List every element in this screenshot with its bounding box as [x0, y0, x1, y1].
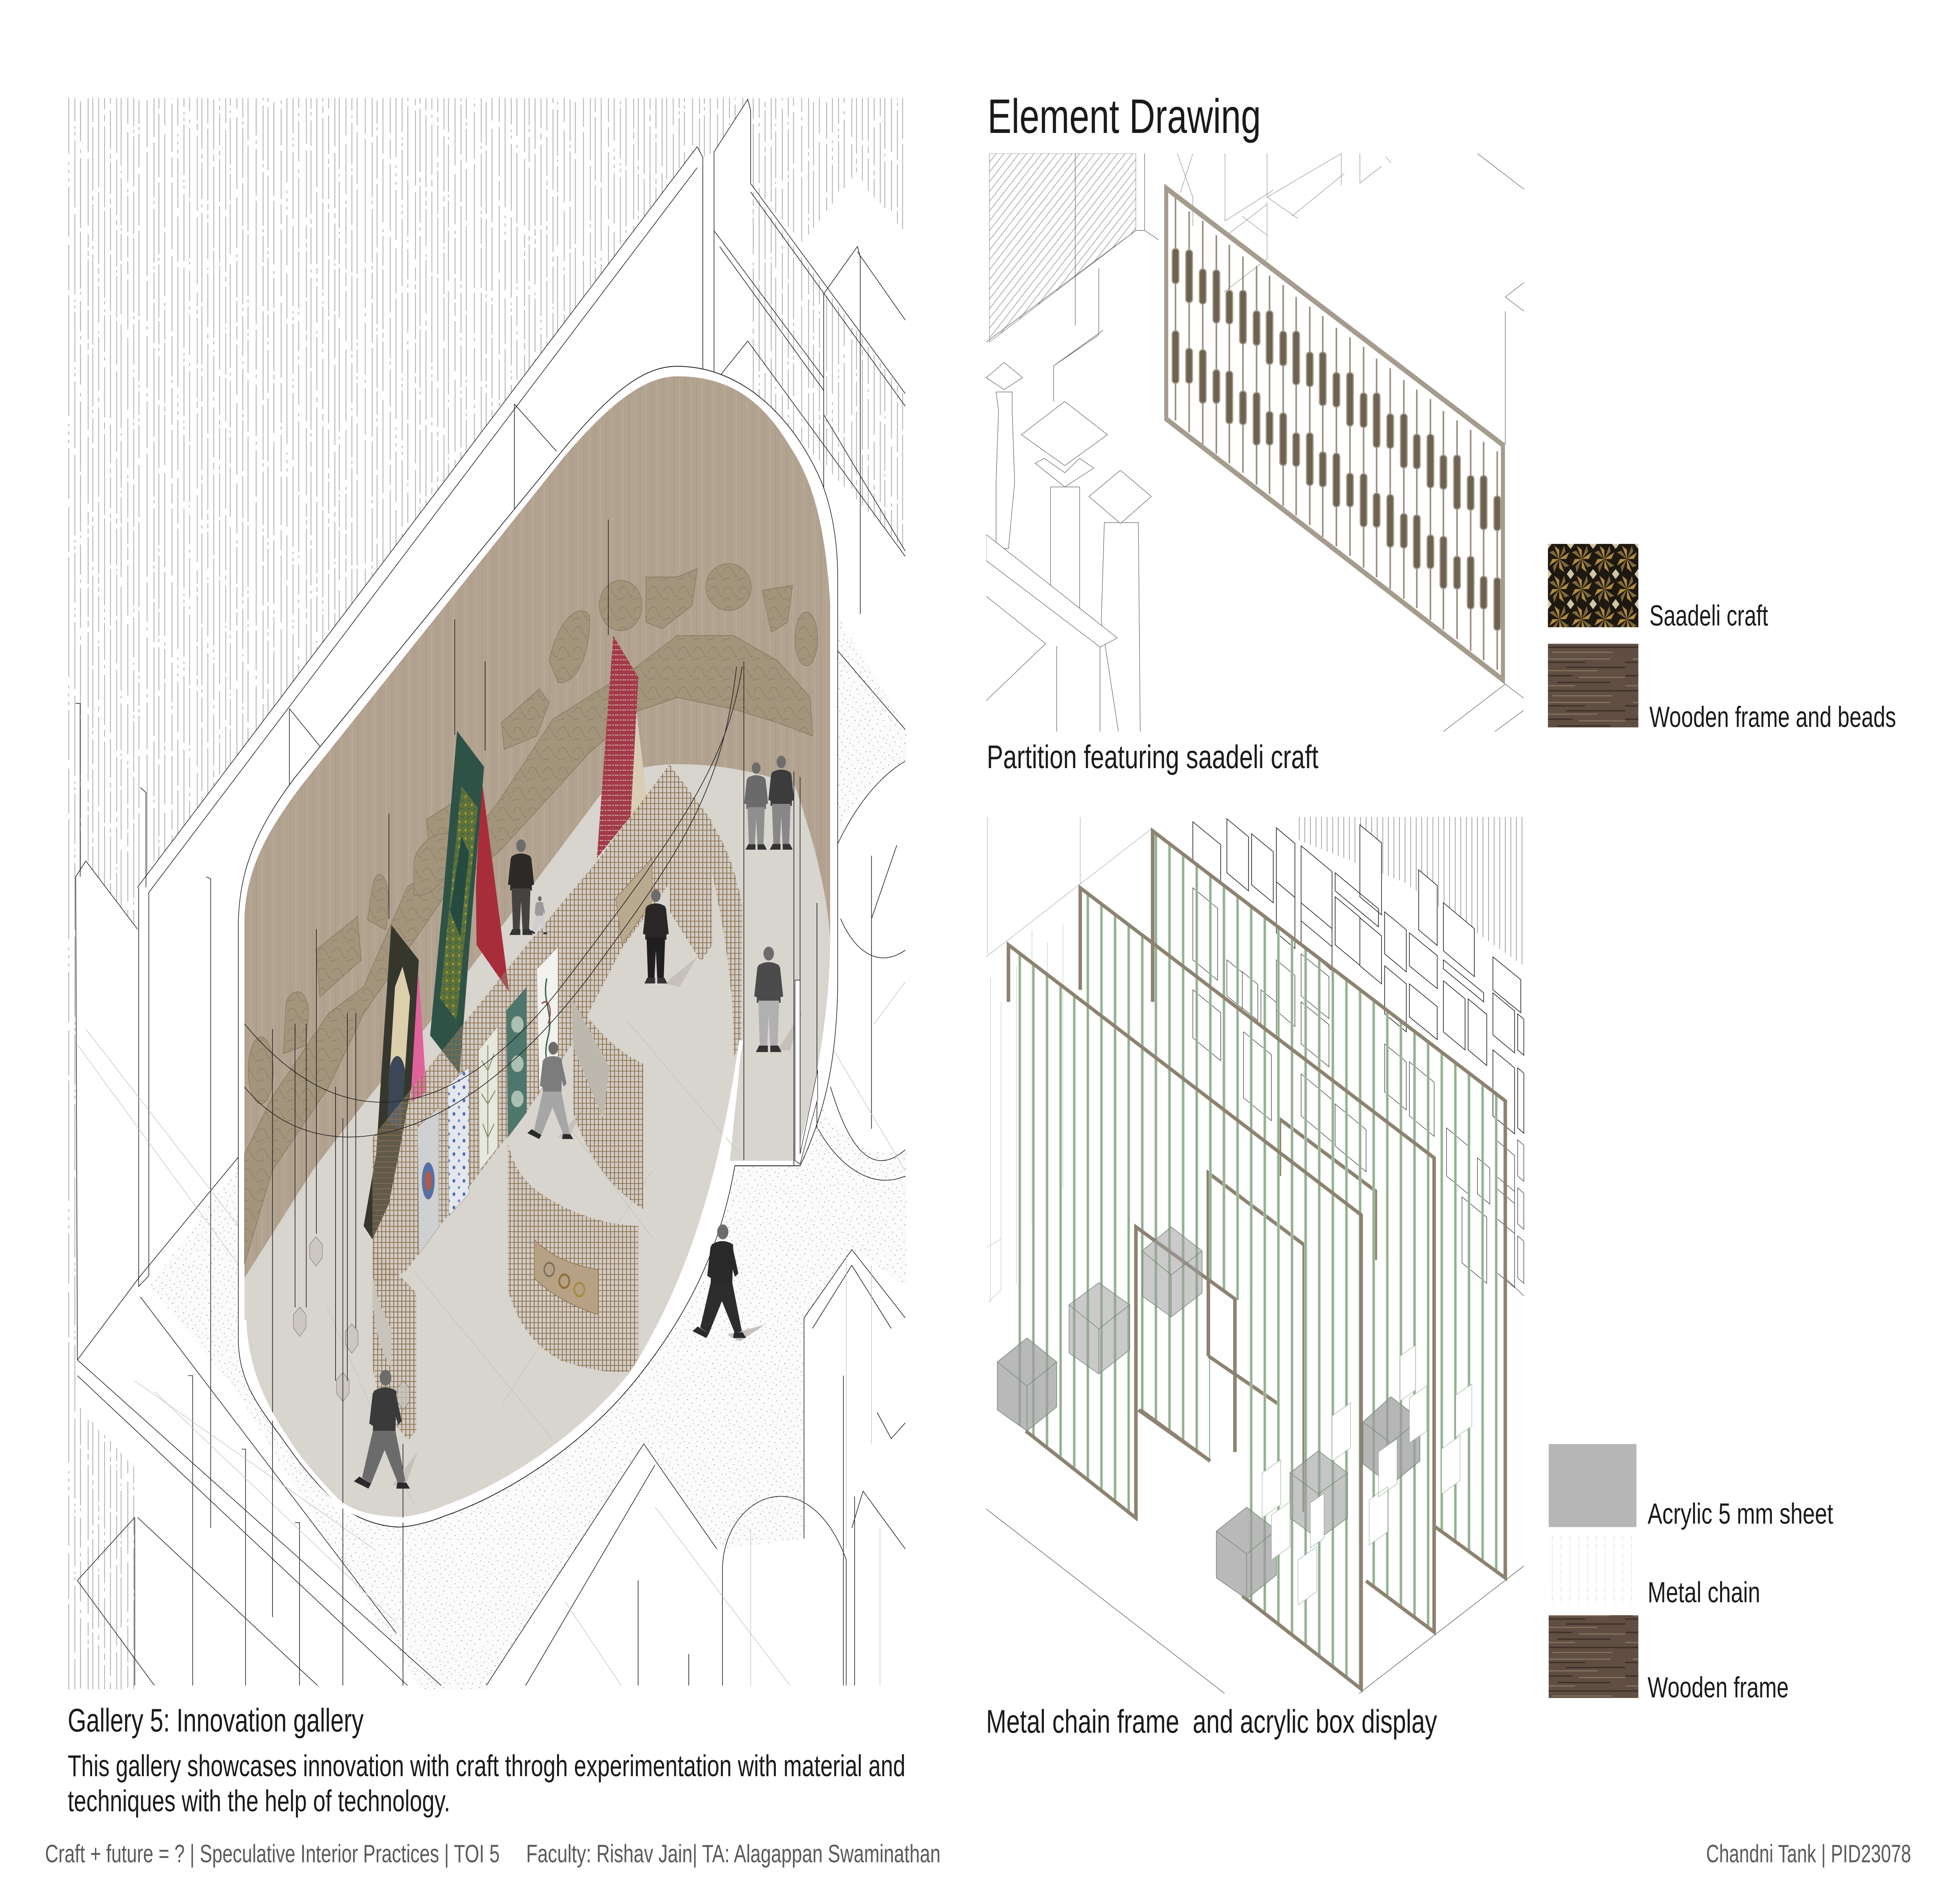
- box 2: [1069, 1283, 1130, 1374]
- carved frieze lower band: [245, 636, 813, 1265]
- footer: author: Chandni Tank | PID23078: [1706, 1840, 1911, 1868]
- swatch: wooden frame: [1549, 1615, 1638, 1698]
- hanging textile: peacock: [364, 925, 426, 1239]
- spine display case: [616, 858, 652, 945]
- lattice screen: jewellery display: [508, 1142, 638, 1372]
- white wall returns: [795, 980, 818, 1164]
- box 4: [1216, 1507, 1276, 1599]
- partition frame: [1166, 188, 1503, 680]
- background: dashed vertical hatching: [69, 5, 936, 1693]
- hanging textile: green carpet: [430, 731, 484, 1074]
- person: man in front walking: [354, 1370, 410, 1488]
- text: gallery description: [68, 1750, 906, 1818]
- floor joints and shadows: [326, 957, 802, 1505]
- footer: course line: Craft + future = ? | Speculative Interior Practices | TOI 5: [45, 1840, 500, 1868]
- panel: teal roundels: [506, 987, 527, 1137]
- heading: element drawing: Element Drawing: [987, 89, 1261, 144]
- panel: blue medallion: [417, 1107, 439, 1254]
- context: panelled wall and lines: [986, 817, 1524, 1694]
- box 3: [1142, 1227, 1202, 1317]
- speckled terrazzo ground: [149, 602, 907, 1689]
- person: man on right: [754, 947, 783, 1052]
- person: man looking at display: [643, 890, 669, 983]
- white display cards: [1262, 1345, 1472, 1605]
- text: gallery description: techniques with the help of technology.: [68, 1785, 450, 1818]
- bottom right white buildings: [737, 1249, 907, 1689]
- person: man with child: [508, 839, 548, 935]
- swatch: wooden frame and beads: [1548, 644, 1638, 727]
- frame 1: front: [1009, 945, 1361, 1689]
- panel: gallery axonometric drawing: [69, 5, 936, 1693]
- swatch: metal chain: [1552, 1535, 1632, 1604]
- label: acrylic: Acrylic 5 mm sheet: [1648, 1497, 1833, 1530]
- architectural line work: [76, 100, 905, 1686]
- heading: gallery title: Gallery 5: Innovation gallery: [68, 1702, 364, 1739]
- person: man on terrazzo: [693, 1225, 746, 1338]
- caption: partition: Partition featuring saadeli craft: [987, 738, 1318, 775]
- hanging textile: red block print: [597, 636, 647, 858]
- box 1: [997, 1338, 1057, 1431]
- lattice screen: far right curve: [711, 823, 742, 1056]
- frame 3: rear: [1152, 831, 1505, 1578]
- lattice partition: right wing: [670, 764, 712, 962]
- panel: sage floral: [478, 1026, 498, 1171]
- label: metal chain: Metal chain: [1648, 1576, 1760, 1608]
- panel: floral mosaic: [537, 947, 558, 1092]
- curved wood wall: [245, 376, 830, 1278]
- swatch: acrylic: [1549, 1444, 1637, 1527]
- lattice screen: centre curve: [572, 999, 643, 1209]
- box 6: [1363, 1397, 1420, 1485]
- hanging textile: red and orange: [476, 778, 509, 992]
- label: wooden frame: Wooden frame: [1648, 1671, 1789, 1704]
- lattice partition: spine: [372, 764, 670, 1288]
- panel: blue tile: [448, 1067, 469, 1216]
- ceiling ring and hanging wires: [244, 520, 817, 1686]
- context hatched wall: [989, 154, 1136, 342]
- footer: faculty: Faculty: Rishav Jain| TA: Alagappan Swaminathan: [526, 1840, 940, 1868]
- person: man in grey walking: [527, 1042, 573, 1139]
- gallery outer shell: [238, 366, 838, 1527]
- hanging acrylic cubes: [294, 1237, 410, 1410]
- acrylic boxes: [997, 1227, 1420, 1599]
- lattice screen: near left: [372, 1248, 416, 1440]
- round tower: [818, 761, 907, 1153]
- panel: metal chain frame drawing: [986, 817, 1524, 1694]
- caption: metal chain frame: Metal chain frame and acrylic box display: [986, 1703, 1437, 1740]
- white building masses: [78, 99, 907, 1689]
- label: saadeli craft: Saadeli craft: [1650, 599, 1768, 632]
- panel: saadeli partition drawing: [986, 153, 1524, 733]
- bottom middle white building: [486, 1443, 737, 1689]
- box 5: [1290, 1451, 1348, 1539]
- saadeli bead columns: chain: [1176, 197, 1497, 670]
- frame 2: middle: [1080, 888, 1434, 1632]
- person: woman: [744, 762, 768, 850]
- doorway wall band: [245, 1040, 741, 1520]
- context line work: [986, 153, 1524, 733]
- wall panels on partition: [417, 947, 558, 1254]
- person: man with backpack: [768, 756, 794, 850]
- saadeli beads: outline: [1176, 252, 1497, 627]
- floor: pale concrete: [245, 764, 830, 1517]
- saadeli beads: fill: [1176, 252, 1497, 627]
- label: wooden frame and beads: Wooden frame and beads: [1650, 700, 1896, 733]
- swatch: saadeli craft: [1548, 544, 1638, 627]
- carved frieze motifs: [248, 564, 818, 1104]
- text: gallery description: This gallery showcases innovation with craft throgh experimentation with material and: [68, 1750, 906, 1783]
